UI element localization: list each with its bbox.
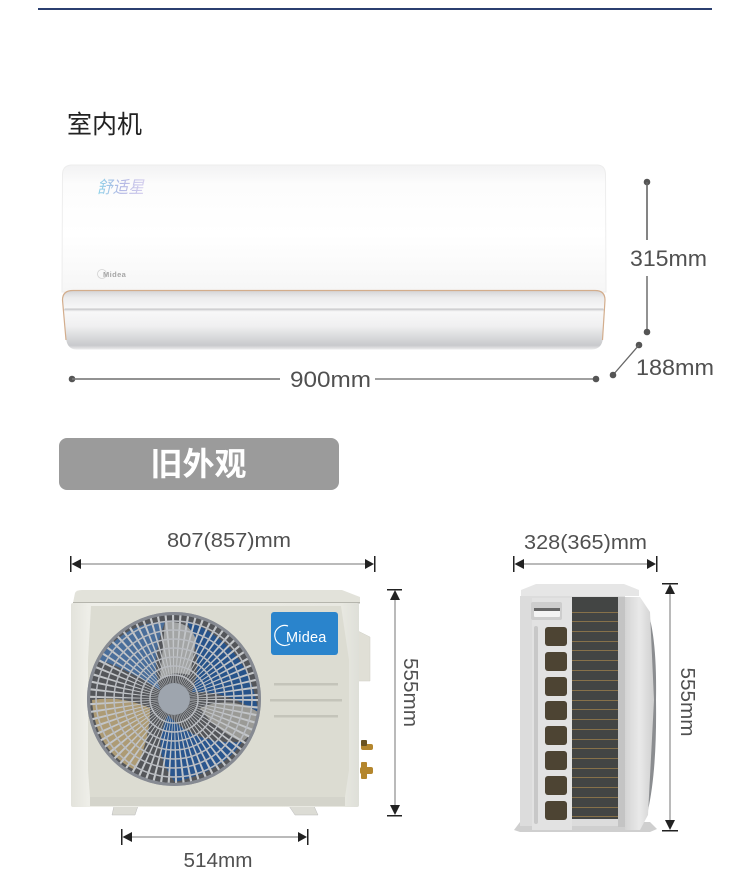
- flap seam: [65, 308, 603, 310]
- outer case: [71, 603, 359, 807]
- dimension: outdoor feet 514mm: [121, 829, 308, 872]
- mounting feet: [112, 806, 138, 815]
- carry handle: [531, 602, 562, 620]
- fan hub: [158, 683, 190, 715]
- dimension: outdoor depth 328(365)mm: 328(365)mm: [524, 532, 647, 554]
- Midea logo badge: [271, 612, 338, 655]
- dimension: indoor height 315mm: [630, 179, 707, 335]
- fan guard: [87, 612, 261, 786]
- coil side bracket: [618, 597, 625, 827]
- dimension: outdoor depth 328(365)mm: [513, 532, 658, 572]
- banner: old appearance: [59, 438, 339, 490]
- side top cover: [521, 584, 639, 596]
- side fan guard bulge: [648, 612, 656, 810]
- side base feet: [514, 822, 657, 832]
- top cover: [73, 590, 360, 603]
- dimension: indoor height 315mm: 315mm: [630, 246, 707, 271]
- dimension: indoor width 900mm: 900mm: [290, 367, 371, 392]
- outdoor unit front view: [71, 590, 373, 815]
- heading: indoor unit: 室内机: [67, 111, 142, 139]
- front panel: [88, 606, 349, 797]
- banner: old appearance: 旧外观: [150, 446, 247, 482]
- louvers: [274, 683, 338, 686]
- indoor unit illustration: [62, 165, 606, 350]
- dimension: indoor depth 188mm: [610, 342, 714, 380]
- dimension: outdoor side height 555mm: [662, 583, 698, 832]
- left grille panel: [532, 598, 572, 830]
- dimension: outdoor width 807(857)mm: [70, 530, 376, 572]
- dimension: outdoor feet 514mm: 514mm: [184, 850, 252, 872]
- radial grille wires: [124, 649, 224, 749]
- side cover: [625, 597, 654, 830]
- top rule: [38, 8, 712, 10]
- side body: [520, 596, 625, 826]
- fan blades: [186, 620, 258, 712]
- indoor unit upper body: [62, 165, 606, 292]
- dimension: outdoor height 555mm: 555mm: [399, 658, 421, 727]
- condenser coil: [572, 597, 618, 819]
- indoor unit product mark: 舒适星: [97, 178, 145, 197]
- dimension: indoor depth 188mm: 188mm: [636, 355, 714, 380]
- indoor unit flap: [62, 290, 606, 350]
- gold trim: [62, 290, 605, 340]
- dimension: indoor width 900mm: [69, 367, 599, 392]
- Midea logo badge: Midea: [286, 630, 327, 646]
- side slot: [534, 626, 538, 824]
- valve bracket: [358, 631, 370, 681]
- brass valves: [360, 740, 373, 779]
- indoor unit Midea logo: Midea: [103, 270, 127, 279]
- dimension: outdoor side height 555mm: 555mm: [676, 668, 698, 736]
- outdoor unit side view: [514, 584, 657, 832]
- ventilation windows: [545, 627, 567, 820]
- concentric grille rings: [96, 621, 252, 777]
- dimension: outdoor height 555mm: [387, 589, 421, 816]
- dimension: outdoor width 807(857)mm: 807(857)mm: [167, 530, 291, 552]
